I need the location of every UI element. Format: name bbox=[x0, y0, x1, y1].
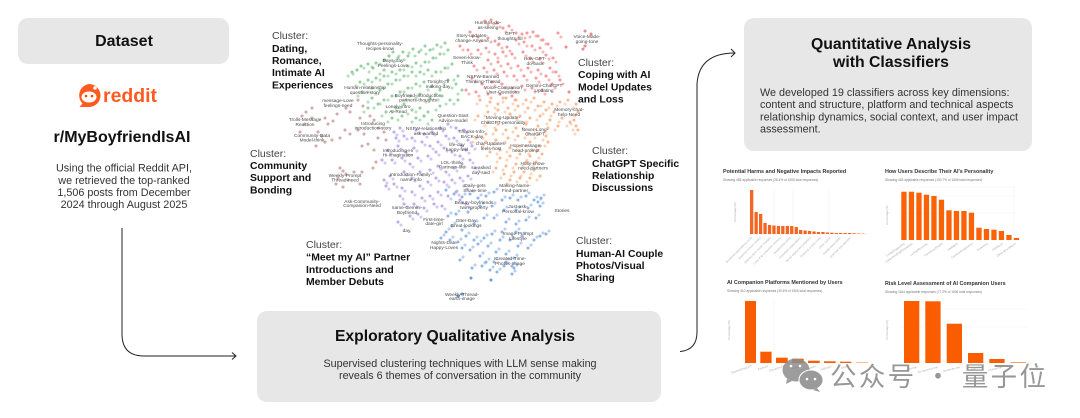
chart: risk level assessment: Moderate risk bbox=[943, 365, 961, 373]
cluster label: partner introductions: Member Debuts bbox=[306, 277, 384, 288]
chart: potential harms: Financial or time costs bbox=[799, 235, 822, 258]
chart: potential harms: Showing 485 applicable responses (28.4% of 1506 total responses) bbox=[723, 178, 818, 182]
chart: potential harms: Reduced human contact bbox=[737, 236, 762, 260]
chart: AI companion platforms bbox=[727, 280, 868, 375]
scatter topic labels: earth-image bbox=[449, 296, 475, 302]
points: purple cluster bbox=[382, 124, 479, 225]
cluster label: community: Community bbox=[250, 161, 307, 172]
chart: potential harms: Grief and loss reported bbox=[829, 236, 852, 259]
scatter topic labels: Voice-Companion bbox=[484, 85, 522, 91]
cluster label: coping bbox=[578, 57, 652, 106]
scatter topic labels: Image-Prompt bbox=[503, 231, 534, 237]
scatter topic labels: Photos-Image bbox=[495, 261, 525, 267]
scatter topic labels: First-time- bbox=[423, 217, 445, 223]
scatter topic labels: Share-time bbox=[463, 188, 487, 194]
chart: AI personality: Loving/Romantic bbox=[909, 241, 929, 257]
panel: exploratory qualitative analysis: Supervised clustering techniques with LLM sense making bbox=[323, 358, 597, 370]
points: blue cluster bbox=[441, 187, 549, 296]
scatter topic labels: Find-partner bbox=[502, 188, 528, 194]
scatter topic labels: Advice-model bbox=[438, 118, 468, 124]
scatter topic labels: Ask-Community- bbox=[344, 199, 380, 205]
cluster label: partner introductions bbox=[306, 239, 410, 288]
scatter topic labels: life-day bbox=[449, 142, 465, 148]
chart: potential harms: Other harms bbox=[818, 235, 832, 250]
scatter topic labels: Holly-know- bbox=[520, 161, 546, 167]
scatter topic labels: as-seeing bbox=[478, 25, 499, 31]
chart: AI companion platforms: Percentage (%) bbox=[727, 320, 731, 340]
scatter topic labels: Memory-chat- bbox=[554, 107, 584, 113]
panel: quantitative analysis with classifiers: with Classifiers bbox=[832, 54, 949, 71]
points: orange cluster bbox=[473, 98, 578, 184]
chart: AI companion platforms: Character.AI bbox=[768, 364, 785, 373]
scatter topic labels: Thinking-Thread bbox=[466, 79, 501, 85]
cluster label: community: Cluster: bbox=[250, 148, 286, 160]
scatter topic labels: Hop-message- bbox=[510, 143, 542, 149]
scatter topic labels: Daily-gets bbox=[464, 183, 486, 189]
scatter topic labels: feels-host bbox=[481, 146, 502, 152]
cluster label: chatgpt: ChatGPT Specific bbox=[592, 159, 679, 170]
dataset description: we retrieved the top-ranked bbox=[57, 175, 190, 187]
cluster label: community bbox=[250, 148, 311, 196]
icon: reddit logo bbox=[79, 84, 158, 107]
scatter topic labels: Weekly-Prompt bbox=[329, 173, 362, 179]
dataset description: 1,506 posts from December bbox=[57, 187, 191, 199]
chart: potential harms bbox=[723, 169, 868, 265]
cluster label: human-ai photos: Sharing bbox=[576, 273, 615, 284]
arrow: dataset to qualitative analysis bbox=[122, 228, 236, 360]
panel: exploratory qualitative analysis: reveals 6 themes of conversation in the community bbox=[339, 370, 582, 382]
cluster label: coping: Cluster: bbox=[578, 57, 614, 69]
scatter topic labels: char-Updates- bbox=[476, 141, 507, 147]
scatter topic labels: Model-think bbox=[300, 138, 325, 144]
panel: quantitative analysis with classifiers bbox=[744, 18, 1032, 151]
chart: AI companion platforms: Showing 410 applicable responses (30.6% of 1506 total responses) bbox=[727, 289, 822, 293]
scatter topic labels: Voice-Made- bbox=[574, 34, 601, 40]
dataset description bbox=[56, 162, 192, 211]
scatter topic labels: Making-Name- bbox=[499, 183, 531, 189]
cluster label: community: Support and bbox=[250, 173, 311, 184]
chart: risk level assessment bbox=[885, 281, 1028, 374]
chart: AI personality: Protective bbox=[976, 241, 989, 252]
chart: potential harms: Social stigma and judgment bbox=[785, 236, 812, 263]
scatter topic labels: Thanks-Info- bbox=[459, 129, 486, 135]
chart: cluster scatter plot bbox=[289, 20, 601, 302]
chart: risk level assessment: No apparent risk bbox=[917, 365, 939, 374]
panel: quantitative analysis with classifiers: content and structure, platform and technical aspects bbox=[760, 99, 1014, 111]
scatter topic labels: going-tone bbox=[576, 39, 599, 45]
scatter topic labels: day, bbox=[403, 228, 411, 234]
scatter topic labels: ICreated-Time- bbox=[494, 256, 526, 262]
chart: AI personality: Intelligent bbox=[946, 241, 959, 252]
scatter topic labels: Never-Long- bbox=[522, 127, 549, 133]
scatter topic labels: Nights-Date bbox=[431, 240, 457, 246]
chart: AI personality bbox=[884, 169, 1019, 264]
scatter topic labels: question-story bbox=[350, 90, 381, 96]
scatter topic labels: ChatGPT bbox=[525, 132, 545, 138]
scatter topic labels: Thread-need bbox=[331, 178, 359, 184]
scatter topic labels: NSFW-relationship bbox=[406, 126, 446, 132]
chart: AI companion platforms: AI Companion Platforms Mentioned by Users bbox=[727, 280, 843, 286]
chart: AI personality: Understanding/Empathetic bbox=[884, 241, 914, 264]
scatter topic labels: Lifestyle bbox=[509, 236, 527, 242]
panel: dataset heading: Dataset bbox=[95, 33, 154, 50]
scatter topic labels: name-Gemini- bbox=[392, 205, 423, 211]
scatter topic labels: Tonight-I'll bbox=[427, 79, 449, 85]
panel: quantitative analysis with classifiers: relationship dynamics, social context, and user impact bbox=[760, 112, 1018, 124]
chart: risk level assessment: High risk bbox=[970, 365, 982, 372]
icon: reddit logo: reddit bbox=[103, 86, 158, 107]
panel: quantitative analysis with classifiers: We developed 19 classifiers across key dimensions: bbox=[760, 87, 1009, 99]
scatter topic labels: Boyfriend bbox=[397, 210, 417, 216]
cluster label: human-ai photos: Human-AI Couple bbox=[576, 249, 663, 260]
cluster label: coping: and Loss bbox=[578, 94, 624, 106]
chart: AI personality: Other descriptions bbox=[996, 241, 1017, 258]
cluster label: coping: Model Updates bbox=[578, 82, 652, 94]
scatter topic labels: help-Need bbox=[558, 112, 580, 118]
cluster label: dating: Intimate AI bbox=[272, 68, 325, 79]
arrow: qualitative to quantitative analysis bbox=[680, 49, 735, 352]
watermark: 公众号 · 量子位 bbox=[830, 355, 1046, 394]
chart: AI companion platforms: Google Gemini bbox=[797, 364, 817, 374]
scatter topic labels: Gemini-ChatGPT bbox=[526, 83, 562, 89]
chart: risk level assessment: Percentage (%) bbox=[885, 320, 889, 340]
chart: risk level assessment: Showing 1164 applicable responses (77.3% of 1506 total responses) bbox=[885, 290, 982, 294]
scatter topic labels: Moving-Update- bbox=[486, 115, 520, 121]
scatter topic labels: twin-property bbox=[460, 205, 488, 211]
chart: AI personality: Caring/Supportive bbox=[885, 241, 906, 258]
cluster label: coping: Coping with AI bbox=[578, 70, 650, 81]
chart: risk level assessment: Critical risk bbox=[988, 365, 1003, 372]
chart: potential harms: Distress from model changes bbox=[743, 235, 772, 264]
scatter topic labels: Introducing bbox=[361, 121, 385, 127]
panel: quantitative analysis with classifiers: Quantitative Analysis bbox=[811, 36, 971, 53]
scatter topic labels: LOL-think- bbox=[441, 160, 464, 166]
scatter topic labels: making-day bbox=[426, 84, 451, 90]
cluster label: human-ai photos: Photos/Visual bbox=[576, 261, 645, 272]
scatter topic labels: Community-Data bbox=[294, 133, 330, 139]
scatter topic labels: AI-Read bbox=[389, 109, 407, 115]
chart: AI companion platforms: Anthropic bbox=[820, 364, 833, 372]
chart: AI companion platforms: OpenAI/ChatGPT bbox=[730, 364, 753, 375]
scatter topic labels: Introduction-Family- bbox=[390, 172, 433, 178]
scatter topic labels: Seven-know- bbox=[453, 55, 481, 61]
chart: potential harms: Unrealistic expectations bbox=[778, 235, 802, 260]
scatter topic labels: BACK-day bbox=[461, 134, 484, 140]
cluster label: partner introductions: Cluster: bbox=[306, 239, 342, 251]
chart: AI companion platforms: Other bbox=[840, 364, 848, 370]
scatter topic labels: Partners-life bbox=[439, 164, 465, 170]
scatter topic labels: Question-Start bbox=[438, 113, 469, 119]
points: brown cluster bbox=[300, 100, 386, 187]
cluster label: partner introductions: “Meet my AI” Partner bbox=[306, 252, 410, 264]
chart: AI personality: Showing 453 applicable responses (100.7% of 1506 total responses) bbox=[885, 178, 982, 182]
scatter topic labels: Beauty-boyfriends bbox=[455, 200, 494, 206]
subreddit name: r/MyBoyfriendIsAI bbox=[54, 129, 190, 146]
cluster label: dating: Cluster: bbox=[272, 30, 308, 42]
scatter topic labels bbox=[289, 20, 601, 302]
cluster label: human-ai photos: Cluster: bbox=[576, 235, 612, 247]
scatter topic labels: happy-feel bbox=[446, 147, 468, 153]
scatter topic labels: Think bbox=[461, 60, 473, 66]
chart: AI personality: How Users Describe Their AI's Personality bbox=[885, 169, 993, 175]
cluster label: chatgpt: Discussions bbox=[592, 183, 653, 194]
scatter topic labels: Hi-imagination bbox=[383, 152, 414, 158]
scatter topic labels: Weekly-Thread- bbox=[445, 292, 479, 298]
chart: potential harms: Relationship strain bbox=[773, 236, 792, 255]
scatter topic labels: thoughts-tol bbox=[497, 36, 523, 42]
scatter topic labels: Days-Say bbox=[383, 58, 404, 64]
chart: AI companion platforms: Replika bbox=[790, 364, 801, 371]
scatter topic labels: Updating bbox=[534, 88, 554, 94]
chart: potential harms: Loss of AI companion memory bbox=[752, 235, 782, 265]
cluster label: chatgpt bbox=[592, 145, 679, 194]
cluster label: community: Bonding bbox=[250, 186, 292, 196]
scatter topic labels: head-prompt bbox=[512, 148, 540, 154]
scatter topic labels: need-partners bbox=[518, 166, 549, 172]
chart: AI personality: Flirtatious bbox=[991, 241, 1004, 252]
scatter topic labels: introduction-story bbox=[355, 126, 392, 132]
chart: AI personality: Humorous/Playful bbox=[923, 241, 944, 257]
scatter topic labels: Lonely-intro bbox=[385, 104, 411, 110]
cluster label: dating: Dating, bbox=[272, 44, 307, 55]
cluster label: dating: Romance, bbox=[272, 56, 322, 67]
scatter topic labels: Stories bbox=[555, 208, 570, 214]
scatter topic labels: partners-thoughts bbox=[399, 98, 437, 104]
scatter topic labels: NSFW-Banned bbox=[467, 74, 499, 80]
cluster label: dating: Experiences bbox=[272, 80, 333, 92]
scatter topic labels: Humans-do- bbox=[475, 20, 502, 26]
chart: AI companion platforms: Kindroid bbox=[757, 364, 769, 371]
scatter topic labels: Story-updates- bbox=[456, 33, 488, 39]
scatter topic labels: ChatGPT-personality bbox=[481, 120, 526, 126]
scatter topic labels: Human-relationship bbox=[344, 85, 386, 91]
panel: exploratory qualitative analysis: Exploratory Qualitative Analysis bbox=[335, 328, 575, 345]
chart: potential harms: Emotional dependency on AI bbox=[725, 236, 753, 264]
scatter topic labels: Companion-Need bbox=[343, 203, 381, 209]
chart: potential harms: Percentage (%) bbox=[733, 202, 737, 222]
chart: AI personality: Creative/Imaginative bbox=[950, 241, 974, 259]
scatter topic labels: message-Love bbox=[322, 98, 354, 104]
scatter topic labels: Boyfriend-introduction bbox=[395, 93, 442, 99]
scatter topic labels: day-said bbox=[472, 170, 490, 176]
cluster label: chatgpt: Relationship bbox=[592, 171, 654, 182]
scatter topic labels: How-GPT- bbox=[524, 56, 547, 62]
scatter topic labels: Personal-know bbox=[502, 209, 534, 215]
scatter topic labels: so-asked bbox=[471, 165, 491, 171]
chart: potential harms: Reality dissociation bbox=[822, 236, 842, 256]
scatter topic labels: do-back bbox=[526, 61, 544, 67]
chart: AI personality: Percentage (%) bbox=[885, 205, 889, 225]
cluster label: human-ai photos bbox=[576, 235, 663, 284]
chart: potential harms: Potential Harms and Negative Impacts Reported bbox=[723, 169, 846, 175]
cluster label: chatgpt: Cluster: bbox=[592, 145, 628, 157]
scatter topic labels: recipes-know bbox=[366, 46, 395, 52]
scatter topic labels: Thoughts-personality- bbox=[357, 41, 404, 47]
chart: risk level assessment: Risk Level Assessment of AI Companion Users bbox=[885, 281, 1006, 287]
scatter topic labels: Just-ask- bbox=[508, 204, 528, 210]
dataset description: 2024 through August 2025 bbox=[61, 199, 187, 211]
scatter topic labels: Trolls-Message bbox=[289, 117, 322, 123]
scatter topic labels: Reaction bbox=[296, 122, 315, 128]
scatter topic labels: name-info bbox=[400, 177, 422, 183]
scatter topic labels: change-Anyone bbox=[455, 38, 489, 44]
cluster label: partner introductions: Introductions and bbox=[306, 265, 394, 276]
scatter topic labels: feelings-need bbox=[324, 103, 353, 109]
panel: quantitative analysis with classifiers: assessment. bbox=[760, 124, 821, 136]
scatter topic labels: Introducing-Hi bbox=[383, 148, 413, 154]
scatter topic labels: Otter-Day bbox=[456, 218, 477, 224]
scatter topic labels: Happy-Loves bbox=[430, 245, 459, 251]
cluster label: dating bbox=[272, 30, 333, 92]
panel: exploratory qualitative analysis bbox=[257, 311, 661, 402]
scatter topic labels: Feelings-Love bbox=[378, 63, 408, 69]
points: green cluster bbox=[348, 43, 462, 124]
chart: risk level assessment: Low risk bbox=[906, 365, 918, 371]
scatter topic labels: ask-wanted bbox=[414, 131, 439, 137]
scatter topic labels: User-Questions bbox=[486, 90, 520, 96]
panel: dataset heading bbox=[18, 18, 229, 64]
dataset description: Using the official Reddit API, bbox=[56, 162, 192, 174]
points: red cluster bbox=[460, 20, 591, 100]
scatter topic labels: date-girl bbox=[425, 221, 443, 227]
scatter topic labels: Great-lookings bbox=[450, 223, 482, 229]
scatter topic labels: GPT bbox=[505, 31, 515, 37]
